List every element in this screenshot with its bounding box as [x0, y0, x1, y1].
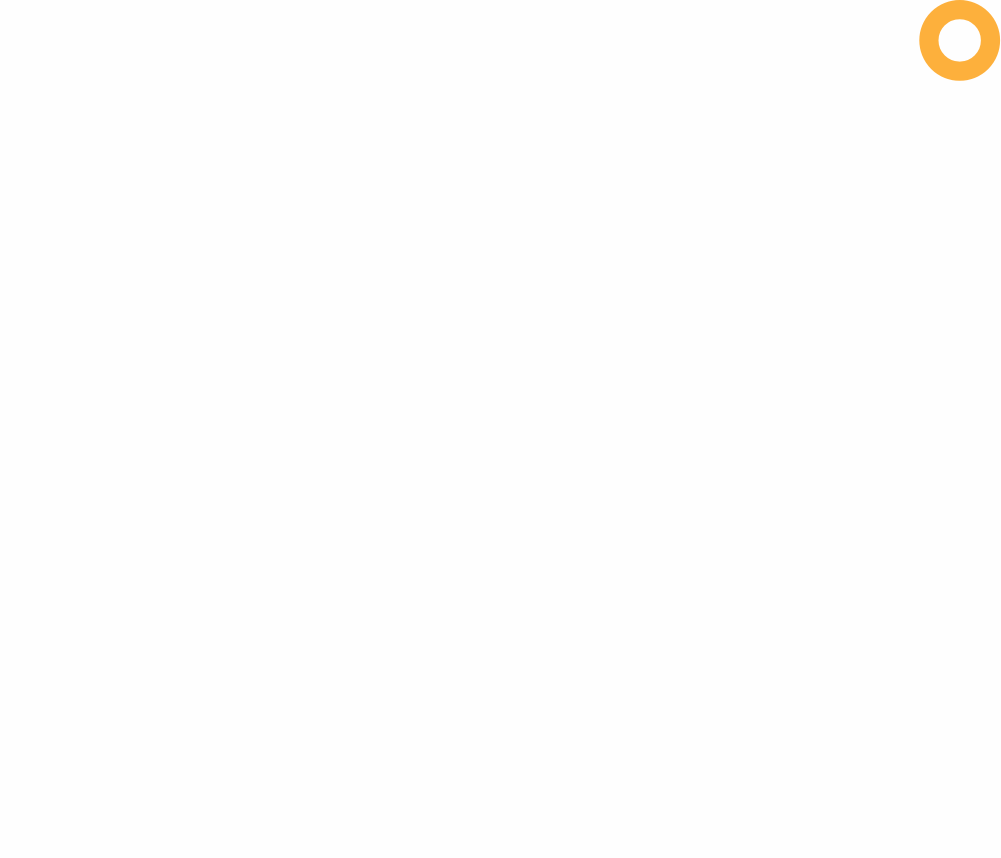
- icon: orange ring: [929, 10, 990, 71]
